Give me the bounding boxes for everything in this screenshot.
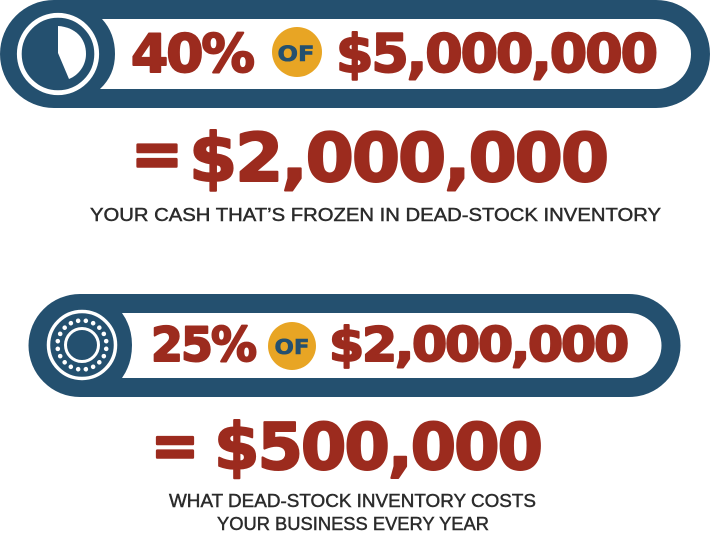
icon: OF badge xyxy=(268,322,316,370)
result: five hundred thousand dollars: = xyxy=(151,411,199,481)
result: two million dollars: $2,000,000 xyxy=(189,119,607,197)
caption: annual cost: WHAT DEAD-STOCK INVENTORY COSTS xyxy=(169,491,536,511)
text: two million dollars: $2,000,000 xyxy=(329,318,627,373)
icon: pie clock showing 40 percent xyxy=(19,15,97,93)
caption: frozen cash: YOUR CASH THAT’S FROZEN IN DEAD-STOCK INVENTORY xyxy=(90,205,661,225)
icon: OF badge xyxy=(272,27,322,77)
text: five million dollars: $5,000,000 xyxy=(336,24,656,85)
text: 40 percent: 40% xyxy=(131,24,254,85)
caption: annual cost xyxy=(169,491,536,534)
panel: first calculation bar xyxy=(0,0,710,108)
result: five hundred thousand dollars: $500,000 xyxy=(214,411,541,485)
icon: ball bearing xyxy=(48,312,116,378)
result: two million dollars: = xyxy=(131,118,183,192)
icon: OF badge: OF xyxy=(274,335,310,359)
text: 25 percent: 25% xyxy=(151,318,256,373)
panel: second calculation bar xyxy=(29,294,681,397)
icon: OF badge: OF xyxy=(278,42,314,66)
caption: annual cost: YOUR BUSINESS EVERY YEAR xyxy=(217,514,489,534)
